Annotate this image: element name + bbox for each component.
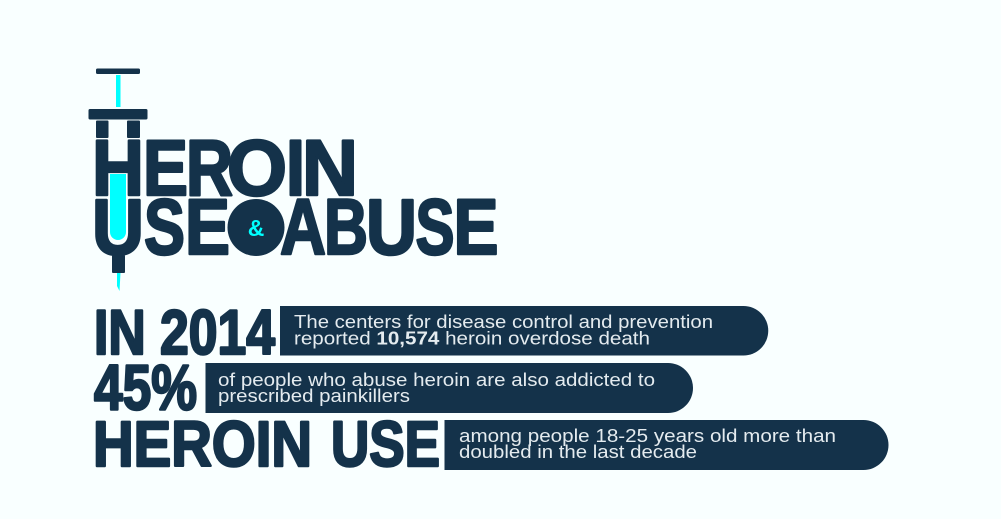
heading line: USE: E: [185, 182, 230, 271]
ampersand badge: [228, 199, 284, 256]
heading line: HEROIN: O: [227, 123, 287, 212]
panel: heroin use statistic: [93, 408, 888, 480]
heading line: ABUSE: A: [280, 182, 326, 271]
pill bar: [206, 363, 693, 413]
heading line: HEROIN: H: [92, 123, 144, 212]
ampersand badge: &: [248, 215, 264, 241]
panel: 45 percent statistic: [94, 352, 693, 424]
heading line: HEROIN: E: [143, 123, 188, 212]
heading line: ABUSE: S: [416, 182, 454, 271]
big label: HEROIN USE: USE: [331, 408, 440, 480]
heading line: USE: S: [144, 182, 185, 271]
heading line: ABUSE: B: [324, 182, 368, 271]
heading line: HEROIN: N: [302, 123, 358, 212]
heading line: ABUSE: U: [366, 182, 417, 271]
big label: HEROIN USE: HEROIN: [93, 408, 312, 480]
pill bar: [444, 420, 888, 470]
heading line: HEROIN: I: [286, 123, 305, 212]
bar text: The centers for disease control and prevention: [294, 312, 713, 332]
panel: 2014 statistic: [94, 298, 768, 368]
pill bar: [280, 306, 768, 356]
bar text: doubled in the last decade: [459, 442, 697, 462]
bar text: reported 10,574 heroin overdose death: [294, 328, 624, 348]
icon: syringe: [88, 68, 148, 291]
bar text: among people 18-25 years old more than: [459, 426, 836, 446]
big label: IN 2014: IN 2014: [94, 298, 275, 368]
title: heroin use and abuse: [92, 123, 498, 271]
heading line: HEROIN: R: [186, 123, 233, 212]
bar text: of people who abuse heroin are also addicted to: [218, 370, 655, 390]
heading line: USE: U: [92, 182, 144, 271]
bar text: prescribed painkillers: [218, 386, 410, 406]
big label: 45%: 45%: [94, 352, 197, 424]
heading line: ABUSE: E: [454, 182, 498, 271]
